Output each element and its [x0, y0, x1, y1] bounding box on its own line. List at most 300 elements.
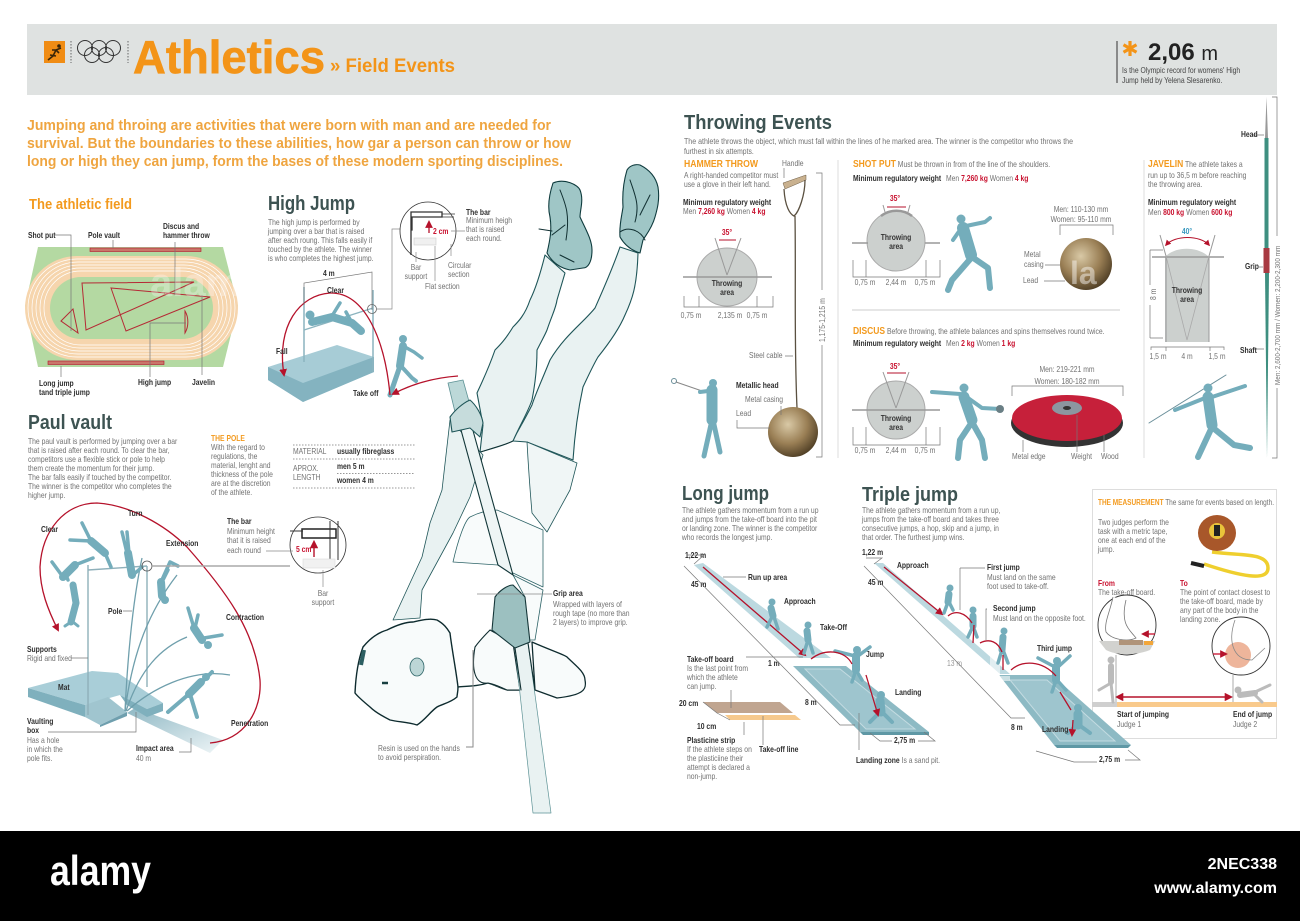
text: take-off board: Take-off board [687, 654, 734, 664]
description [681, 505, 818, 542]
record callout [1117, 39, 1240, 85]
head [355, 619, 458, 725]
right shoe [620, 165, 659, 253]
throwing area diagram: 2,44 m [886, 277, 906, 287]
text: grip area: Wrapped with layers of [553, 599, 623, 609]
text: the pole: of the athlete. [211, 487, 252, 497]
forearm [513, 575, 543, 640]
text: to: To [1180, 578, 1188, 588]
pole table: APROX. [293, 463, 319, 473]
sub-panel: hammer throw: A right-handed competitor must [684, 170, 778, 180]
throwing area diagram: 0,75 m [747, 310, 767, 320]
description: The winner is the competitor who completes the [28, 481, 172, 491]
throwing area diagram [681, 227, 773, 320]
take-off board detail [679, 690, 801, 745]
text: plasticine strip: attempt is declared a [687, 762, 751, 772]
run-up and pit [694, 563, 929, 735]
watermark: la [1070, 255, 1097, 291]
description: that order. The furthest jump wins. [862, 532, 964, 542]
left shoe [539, 181, 592, 270]
sub-panel: shot put: SHOT PUT Must be thrown in from of the line of the shoulders. [853, 158, 1050, 169]
shorts [527, 442, 577, 532]
labels: 1,22 m [685, 550, 706, 560]
figures: vaulter sequence [52, 523, 222, 717]
sub-panel: hammer throw: Men 7,260 kg Women 4 kg [683, 206, 766, 216]
footer band [0, 831, 1300, 921]
heading: Long jump [682, 483, 769, 505]
intro text [27, 118, 572, 170]
panel: the athletic field: hammer throw [163, 230, 210, 240]
upper hand [450, 400, 483, 437]
take-off board detail: 10 cm [697, 721, 717, 731]
discus: Weight [1071, 451, 1092, 461]
heading: Throwing Events [684, 112, 832, 134]
text: grip area: 2 layers) to improve grip. [553, 617, 628, 627]
description: consecutive jumps, a hop, skip and a jump, in [862, 523, 999, 533]
title: Athletics [133, 31, 325, 83]
discus [1011, 364, 1123, 461]
description: and jumps from the take-off board into the pit [682, 514, 817, 524]
pole table: LENGTH [293, 472, 321, 482]
description: one at each end of the [1098, 535, 1166, 545]
sub-panel: shot put: Minimum regulatory weight [853, 173, 942, 183]
right lump [532, 642, 585, 698]
pole table: usually fibreglass [337, 446, 394, 456]
panel: high jump: Flat section [425, 281, 460, 291]
hammer: Lead [736, 408, 751, 418]
sub-panel: shot put [852, 158, 1120, 310]
watermark: alam [150, 261, 241, 305]
throwing area diagram: 35° [722, 227, 732, 237]
throwing area diagram: 8 m [1148, 289, 1158, 300]
text: from: The take-off board. [1098, 587, 1155, 597]
heading: High Jump [268, 193, 355, 215]
throwing area diagram: 0,75 m [855, 445, 875, 455]
panel: the athletic field: Pole vault [88, 230, 121, 240]
throwing area diagram: area [720, 287, 735, 297]
sub-panel: hammer throw [672, 158, 827, 457]
panel: pole vault: box [27, 725, 40, 735]
description: The athlete gathers momentum from a run up, [862, 505, 1000, 515]
throwing area diagram [1148, 226, 1225, 361]
panel: long jump: 45 m [691, 579, 707, 589]
heading: Paul vault [28, 412, 112, 434]
shot ball [1023, 204, 1113, 291]
detail: body in landing zone [1212, 617, 1270, 675]
panel: pole vault: support [312, 597, 334, 607]
hammer [736, 158, 827, 457]
left leg [477, 255, 565, 452]
hammer: Metal casing [745, 394, 783, 404]
panel: measurement: End of jump [1233, 709, 1273, 719]
panel: long jump: Take-Off [820, 622, 847, 632]
sub-panel: discus [852, 325, 1123, 461]
throwing area diagram: 35° [890, 361, 900, 371]
panel: pole vault: Has a hole [27, 735, 59, 745]
text: the pole: With the regard to [211, 442, 265, 452]
detail: vault bar circle [142, 517, 346, 587]
panel: pole vault: in which the [27, 744, 63, 754]
raised arm [393, 420, 483, 620]
throwing area diagram: 1,5 m [1150, 351, 1166, 361]
description: The paul vault is performed by jumping over a bar [28, 436, 178, 446]
description [684, 137, 1073, 156]
upper torso [453, 510, 543, 587]
panel: triple jump: Must land on the opposite foot. [993, 613, 1086, 623]
text: the bar: each round. [466, 233, 502, 243]
run-up and pit [874, 563, 1131, 748]
throwing area diagram: 40° [1182, 226, 1192, 236]
panel: the athletic field: High jump [138, 377, 172, 387]
text: take-off board: Is the last point from [687, 663, 748, 673]
logo: alamy: alamy [50, 847, 152, 894]
subtitle: » Field Events [330, 56, 455, 77]
sub-panel: javelin: run up to 36,5 m before reaching [1148, 170, 1246, 180]
panel: triple jump [861, 484, 1140, 764]
labels: Clear [41, 524, 58, 534]
text: to: landing zone. [1180, 614, 1220, 624]
javelin: Men: 2,600-2,700 mm / Women: 2,200-2,300 mm [1275, 245, 1282, 385]
website: www.alamy.com [1153, 880, 1277, 897]
figure: discus thrower [932, 384, 1004, 458]
record callout: 2,06 m [1148, 39, 1218, 66]
figure: hammer thrower [672, 378, 720, 456]
panel: pole vault: Contraction [226, 612, 264, 622]
text: the bar: Minimum heigh [466, 215, 512, 225]
panel: measurement: Judge 1 [1117, 719, 1141, 729]
panel: the athletic field: Long jump [39, 378, 74, 388]
discus: Metal edge [1012, 451, 1046, 461]
panel: measurement: Judge 2 [1233, 719, 1257, 729]
panel: pole vault: Turn [128, 508, 143, 518]
mat and bar [268, 287, 374, 402]
panel: pole vault: Penetration [231, 718, 269, 728]
text: from [1098, 578, 1155, 597]
illustration: sketched pole vaulter [355, 165, 659, 813]
torso line [481, 441, 513, 452]
left lump [474, 630, 520, 690]
panel: high jump: Bar [411, 262, 422, 272]
panel: pole vault: Extension [166, 538, 199, 548]
throwing area diagram: 35° [890, 193, 900, 203]
panel: long jump: Run up area [748, 572, 788, 582]
panel: long jump: Landing zone Is a sand pit. [856, 755, 940, 765]
javelin: Head [1241, 129, 1258, 139]
heading: THE MEASUREMENT The same for events based on length. [1098, 498, 1274, 507]
sub-panel: javelin [1148, 97, 1282, 458]
panel: high jump [267, 193, 512, 402]
description: touched by the athlete. The winner [268, 244, 372, 254]
figure: take-off runner [390, 335, 422, 395]
panel: pole vault: Vaulting [27, 716, 54, 726]
sub-panel: discus: Minimum regulatory weight [853, 338, 942, 348]
throwing area diagram: area [889, 241, 904, 251]
discus: Men: 219-221 mm [1039, 364, 1095, 374]
throwing area diagram: 2,135 m [718, 310, 742, 320]
pole top [448, 380, 470, 412]
description: The athlete gathers momentum from a run up [682, 505, 818, 515]
sub-panel: shot put: Men 7,260 kg Women 4 kg [946, 173, 1029, 183]
discus: Wood [1101, 451, 1119, 461]
header band [27, 24, 1277, 95]
throwing area diagram: 0,75 m [855, 277, 875, 287]
icon: athletics pictogram [44, 41, 65, 63]
throwing area diagram: 2,44 m [886, 445, 906, 455]
text: plasticine strip: the plasticiine their [687, 753, 744, 763]
panel: the athletic field: tand triple jump [39, 387, 90, 397]
heading: Triple jump [862, 484, 958, 506]
watermark [990, 654, 1010, 681]
panel: long jump: Jump [866, 649, 885, 659]
figures [767, 598, 892, 722]
javelin [1240, 97, 1282, 458]
shot ball: Lead [1023, 275, 1038, 285]
panel: long jump [679, 483, 940, 781]
intro text: survival. But the boundaries to these abilities, how gar a person can throw or how [27, 136, 572, 152]
description: them create the momentum for their jump. [28, 463, 154, 473]
panel: the athletic field [25, 196, 241, 397]
description: jump. [1097, 544, 1114, 554]
description: furthest in six attempts. [684, 146, 754, 156]
icon: asterisk [1124, 41, 1136, 56]
throwing area diagram [852, 361, 940, 455]
panel: long jump: 8 m [805, 697, 817, 707]
shot ball: Metal [1024, 249, 1041, 259]
sub-panel: javelin: Men 800 kg Women 600 kg [1148, 207, 1233, 217]
text: the bar: The bar [227, 516, 252, 526]
text: to: any part of the body in the [1180, 605, 1258, 615]
text: resin: to avoid perspiration. [378, 752, 441, 762]
panel: triple jump: Second jump [993, 603, 1036, 613]
text: plasticine strip: non-jump. [687, 771, 717, 781]
field plan [25, 247, 238, 367]
description: task with a metric tape, [1098, 526, 1167, 536]
panel: high jump: Take off [353, 388, 379, 398]
description [1097, 517, 1169, 554]
text: resin [378, 650, 473, 762]
text: the bar: each round [227, 545, 261, 555]
throwing area diagram: 1,5 m [1209, 351, 1225, 361]
text: the bar [227, 516, 275, 555]
arrow: jump arc [282, 293, 458, 395]
panel: high jump: section [448, 269, 469, 279]
figures [944, 584, 1090, 733]
text: the pole: material, lenght and [211, 460, 271, 470]
take-off board detail: 20 cm [679, 698, 699, 708]
sub-panel: hammer throw: use a glove in their left hand. [684, 179, 771, 189]
javelin: Shaft [1240, 345, 1257, 355]
panel: triple jump: 8 m [1011, 722, 1023, 732]
sub-panel: discus: DISCUS Before throwing, the athlete balances and spins themselves round twice. [853, 325, 1105, 336]
text: the bar: that is raised [466, 224, 504, 234]
measure line and ground [1092, 655, 1277, 707]
text: take-off board: can jump. [687, 681, 716, 691]
shot ball: Men: 110-130 mm [1054, 204, 1108, 214]
text: the pole: are at the discretion [211, 478, 271, 488]
panel: pole vault: Pole [108, 606, 122, 616]
text: the pole [211, 433, 273, 497]
text: the pole: thickness of the pole [211, 469, 273, 479]
right leg [513, 247, 638, 460]
text: from: From [1098, 578, 1115, 588]
heading: The athletic field [29, 196, 132, 213]
throwing area diagram: 0,75 m [915, 277, 935, 287]
panel: triple jump: 2,75 m [1099, 754, 1120, 764]
description: The athlete throws the object, which must fall within the lines of he marked area. The winner is the competitor who throws the [684, 137, 1073, 146]
throwing area diagram: 0,75 m [681, 310, 701, 320]
description: competitors use a flexible stick or pole to help [28, 454, 165, 464]
text: the bar: that it is raised [227, 535, 271, 545]
detail: bar circle: 2 cm [433, 226, 449, 236]
sub-panel: javelin: JAVELIN The athlete takes a [1148, 158, 1243, 169]
description: higher jump. [28, 490, 65, 500]
panel: throwing events [672, 97, 1282, 461]
panel: pole vault: Rigid and fixed [27, 653, 72, 663]
throwing area diagram: 4 m [1181, 351, 1193, 361]
panel: pole vault: Supports [27, 644, 57, 654]
figure: shot putter [948, 214, 990, 290]
figure: jumper clearing bar [306, 303, 361, 331]
labels: Start of jumping [1117, 709, 1169, 719]
panel: measurement [1092, 490, 1277, 738]
sub-panel: hammer throw: Minimum regulatory weight [683, 197, 772, 207]
arrow: flight path [40, 503, 260, 743]
record callout: Jump held by Yelena Slesarenko. [1122, 75, 1222, 85]
discus: Women: 180-182 mm [1034, 376, 1100, 386]
pole table [293, 445, 415, 488]
text: take-off board [686, 654, 748, 691]
panel: triple jump: 45 m [868, 577, 884, 587]
description: after each roung. This falls easily if [268, 235, 373, 245]
text: to: the take-off board, made by [1180, 596, 1263, 606]
text: to: The point of contact closest to [1180, 587, 1270, 597]
description: jumps from the take-off board and takes three [861, 514, 999, 524]
panel: triple jump: First jump [987, 562, 1020, 572]
description: who records the longest jump. [681, 532, 772, 542]
sub-panel: javelin: Minimum regulatory weight [1148, 197, 1237, 207]
sub-panel: hammer throw: HAMMER THROW [684, 159, 758, 170]
record callout: Is the Olympic record for womens' High [1122, 65, 1240, 75]
icon: olympic rings [71, 40, 128, 63]
text: the pole: regulations, the [211, 451, 257, 461]
description: The bar falls easily if touched by the competitor. [28, 472, 171, 482]
pole positions [125, 558, 230, 711]
throwing area diagram: area [889, 422, 904, 432]
description [267, 217, 374, 263]
detail: vault bar circle: 5 cm [296, 544, 312, 554]
throwing area diagram: Throwing [1172, 285, 1203, 295]
sub-panel: javelin: the throwing area. [1148, 179, 1202, 189]
panel: the athletic field: Javelin [192, 377, 215, 387]
labels: 1,22 m [862, 547, 883, 557]
pole lower [515, 643, 551, 813]
hammer: 1,175-1,215 m [817, 298, 827, 342]
panel: the athletic field: Discus and [163, 221, 200, 231]
text: grip area: rough tape (no more than [553, 608, 630, 618]
description [28, 436, 178, 500]
panel: long jump: 1 m [768, 658, 780, 668]
icon: metric tape [1191, 515, 1268, 576]
throwing area diagram: Throwing [881, 413, 912, 423]
panel: triple jump: 13 m [947, 658, 962, 668]
description [861, 505, 1000, 542]
description: The high jump is performed by [268, 217, 360, 227]
throwing area diagram: 0,75 m [915, 445, 935, 455]
throwing area diagram [852, 193, 940, 287]
panel: triple jump: Third jump [1037, 643, 1072, 653]
panel: triple jump: foot used to take-off. [987, 581, 1049, 591]
text: plasticine strip: If the athlete steps on [687, 744, 752, 754]
panel: triple jump: Must land on the same [987, 572, 1056, 582]
text: the pole: THE POLE [211, 433, 245, 443]
lower hand [492, 585, 530, 648]
text: the bar [466, 207, 512, 243]
panel: pole vault: pole fits. [27, 753, 52, 763]
description: is who completes the highest jump. [268, 253, 374, 263]
text: plasticine strip [687, 735, 752, 781]
text: the bar: The bar [466, 207, 491, 217]
panel: pole vault: 40 m [136, 753, 151, 763]
text: to [1180, 578, 1270, 624]
panel: high jump: support [405, 271, 427, 281]
figure: javelin thrower [1149, 375, 1250, 457]
panel: high jump: Clear [327, 285, 344, 295]
text: grip area [477, 588, 630, 627]
panel: long jump: Landing [895, 687, 922, 697]
hammer: Handle [782, 158, 804, 168]
panel: triple jump: Approach [897, 560, 929, 570]
pole table: men 5 m [337, 461, 365, 471]
pole table: MATERIAL [293, 446, 326, 456]
intro text: long or high they can jump, form the bases of these modern sporting disciplines. [27, 154, 563, 170]
image id: 2NEC338 [1208, 856, 1277, 873]
shot ball: casing [1024, 259, 1044, 269]
detail: bar circle [368, 202, 465, 314]
panel: pole vault: Impact area [136, 743, 175, 753]
panel: long jump: Approach [784, 596, 816, 606]
panel: long jump: 2,75 m [894, 735, 915, 745]
panel: high jump: Fall [276, 346, 288, 356]
javelin: Grip [1245, 261, 1259, 271]
pole table: women 4 m [336, 475, 374, 485]
pole upper [461, 427, 513, 575]
description: or landing zone. The winner is the competitor [682, 523, 818, 533]
hammer: Steel cable [749, 350, 783, 360]
panel: triple jump: Landing [1042, 724, 1069, 734]
throwing area diagram: Throwing [881, 232, 912, 242]
throwing area diagram: Throwing [712, 278, 743, 288]
hammer: Metallic head [736, 380, 779, 390]
sub-panel: discus: Men 2 kg Women 1 kg [946, 338, 1016, 348]
panel: pole vault: Bar [318, 588, 329, 598]
text: plasticine strip: Plasticine strip [687, 735, 736, 745]
panel: high jump: Circular [448, 260, 472, 270]
throwing area diagram: area [1180, 294, 1195, 304]
text: take-off board: which the athlete [686, 672, 738, 682]
supports and bar [88, 565, 147, 715]
description: that is raised after each round. To clear the bar, [28, 445, 170, 455]
text: resin: Resin is used on the hands [378, 743, 460, 753]
text: grip area: Grip area [553, 588, 584, 598]
text: the bar: Minimum height [227, 526, 275, 536]
panel: long jump: Take-off line [759, 744, 798, 754]
description: Two judges perform the [1098, 517, 1169, 527]
shot ball: Women: 95-110 mm [1051, 214, 1111, 224]
mat and vaulting box [28, 671, 223, 753]
labels: Shot put [28, 230, 56, 240]
panel: pole vault: Mat [58, 682, 70, 692]
shoulder [458, 683, 520, 690]
